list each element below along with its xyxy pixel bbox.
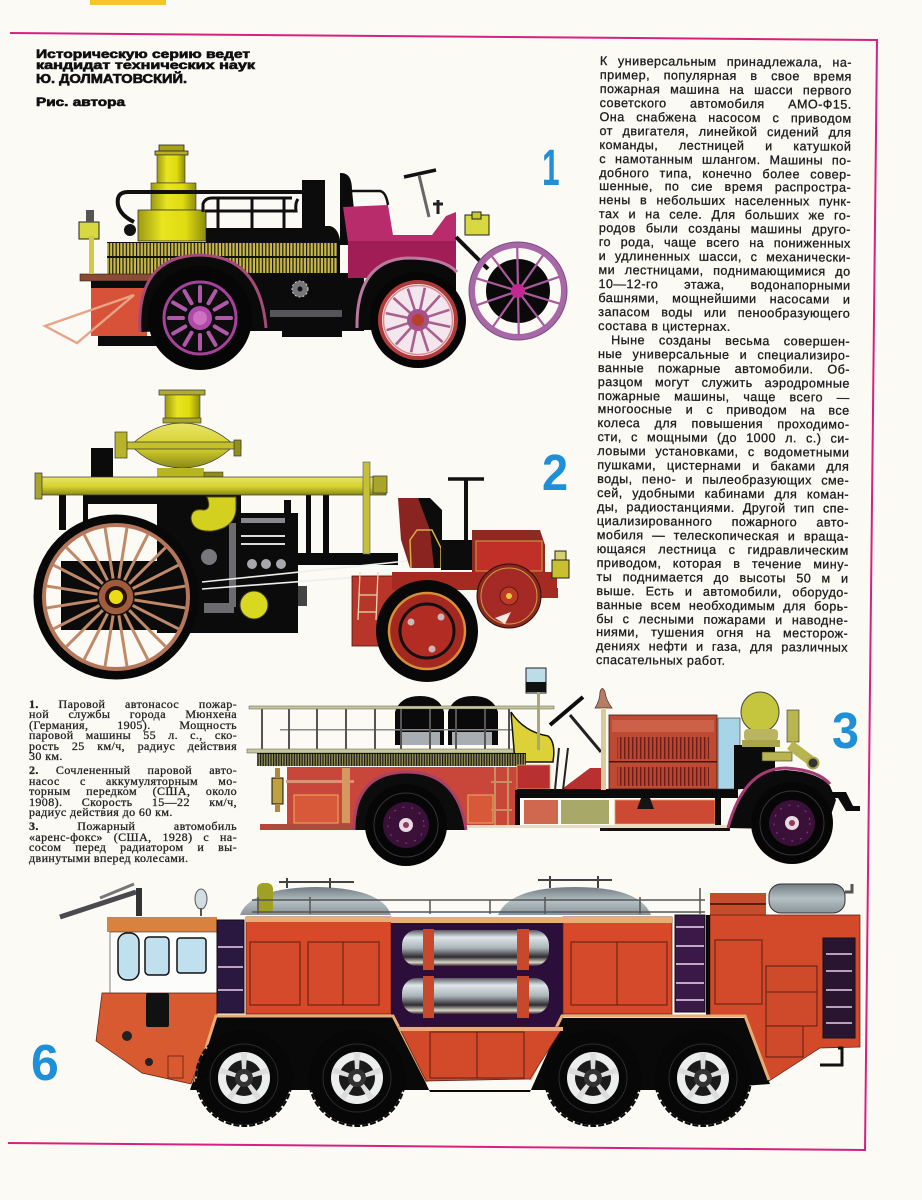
front small wheel xyxy=(477,564,541,628)
article text column: родов были созданы машины друго- xyxy=(599,221,851,237)
water monitor xyxy=(60,884,207,917)
byline heading xyxy=(36,49,255,109)
front fender and bumper xyxy=(728,768,860,830)
article text column: 10—12-го этажа, водонапорными xyxy=(598,277,851,293)
article text column: с намотанным шлангом. Машины по- xyxy=(599,152,851,167)
pipes and rails xyxy=(118,192,302,229)
figure captions: сосом перед радиатором и вы- xyxy=(29,840,237,854)
article text column: спасательных работ. xyxy=(596,653,725,668)
article text column: многоосные и с приводом на все xyxy=(598,402,850,418)
figure captions: 3. Пожарный автомобиль xyxy=(29,819,237,833)
seat post and rail xyxy=(340,173,388,245)
article text column: от двигателя, линейкой сидений для xyxy=(599,124,852,139)
article text column: добного типа, конечно более совер- xyxy=(599,165,851,181)
article text column: воды, пено- и пылеобразующих сме- xyxy=(597,472,849,488)
article text column: К универсальным принадлежала, на- xyxy=(600,54,852,70)
article text column: ми лестницами, поднимающимися до xyxy=(599,263,851,279)
article text column: ды, радиостанциями. Другой тип спе- xyxy=(597,500,849,516)
figure captions: торным передком (США, около xyxy=(29,784,237,798)
figure captions xyxy=(28,696,237,865)
truck 2: articulated steam pump, USA 1908 xyxy=(35,390,569,682)
article text column: пушками, цистернами и баками для xyxy=(597,458,849,474)
article text column: мобиля — телескопическая и враща- xyxy=(597,528,849,544)
brass dome and chimney xyxy=(115,390,241,478)
figure captions: 2. Сочлененный паровой авто- xyxy=(29,763,237,777)
figure captions: паровой машины 55 л. с., ско- xyxy=(29,728,237,742)
figure numbers: 2 xyxy=(542,445,568,501)
article text column: Ныне созданы весьма совершен- xyxy=(611,333,850,348)
waist trim xyxy=(195,1016,769,1082)
truck 6: multi-axle airport tender xyxy=(60,876,860,1126)
article text column: запасом воды или пенообразующего xyxy=(598,305,850,321)
figure numbers: 6 xyxy=(31,1034,59,1091)
steering xyxy=(404,170,443,217)
rear wheel xyxy=(148,266,252,370)
horizontal tube xyxy=(35,462,387,554)
front ladder xyxy=(217,920,244,1013)
rear fender xyxy=(140,255,266,332)
black boiler frame xyxy=(59,448,398,633)
figure captions: рость 25 км/ч, радиус действия xyxy=(29,739,237,753)
article text column: приводом, которая в течение мину- xyxy=(597,556,849,571)
spare wheel xyxy=(456,237,567,340)
figure captions: радиус действия до 60 км. xyxy=(29,805,173,819)
article text column: пожарные машины, чаще всего — xyxy=(598,388,850,404)
figure captions: «аренс-фокс» (США, 1928) с на- xyxy=(29,830,237,844)
article text column: циализированного пожарного авто- xyxy=(597,514,849,530)
article text column: дениях нефти и газа, для различных xyxy=(596,639,848,655)
article text column: колеса для повышения проходимо- xyxy=(598,416,850,432)
cab xyxy=(343,205,457,330)
body front section xyxy=(246,917,391,1014)
article text column: шенные, по сие время распростра- xyxy=(599,179,851,195)
hose bed xyxy=(107,242,337,274)
byline heading: Историческую серию ведет xyxy=(36,49,250,61)
side lamp xyxy=(552,551,569,578)
article text column: пожарная машина на шасси первого xyxy=(600,82,852,98)
rear body xyxy=(260,767,517,830)
figure captions: 1. Паровой автонасос пожар- xyxy=(29,696,237,710)
hood xyxy=(609,715,717,789)
rear platform xyxy=(45,274,156,346)
hood xyxy=(472,530,545,572)
body middle section xyxy=(391,917,672,1014)
article text column: ные универсальные и специализиро- xyxy=(598,347,850,362)
article text column: Она снабжена насосом с приводом xyxy=(600,110,852,125)
article text column: го рода, чаще всего на пониженных xyxy=(599,235,851,251)
article text column: ловыми установками, с водометными xyxy=(597,444,849,460)
front wheel xyxy=(370,272,466,368)
article text column: нены в небольших населенных пунк- xyxy=(599,193,851,209)
pump front xyxy=(734,692,818,789)
figure captions: насос с аккумуляторным мо- xyxy=(29,774,237,788)
main forecarriage wheel xyxy=(376,580,478,682)
ladder xyxy=(247,706,554,753)
lamps xyxy=(79,210,489,274)
truck 3: Ahrens-Fox, USA 1928 xyxy=(247,668,860,866)
wheels xyxy=(196,1030,751,1126)
article text column: ты поднимается до высоты 50 м и xyxy=(596,570,849,585)
tank bay xyxy=(391,923,563,1028)
boiler details xyxy=(201,518,307,619)
article text column: разцом могут служить аэродромные xyxy=(598,375,850,390)
hose bed xyxy=(257,753,526,766)
article text column: команды, лестницей и катушкой xyxy=(599,138,851,153)
roof domes xyxy=(240,876,651,915)
article text column xyxy=(596,54,852,668)
large rear wheel xyxy=(38,519,194,675)
article text column: советского автомобиля АМО-Ф15. xyxy=(600,96,852,111)
figure captions: 1908). Скорость 15—22 км/ч, xyxy=(29,795,237,809)
steering wheel xyxy=(550,697,601,790)
cab xyxy=(96,917,217,1084)
article text column: выше. Есть и автомобили, оборудо- xyxy=(596,584,848,599)
seat xyxy=(511,712,554,762)
figure captions: (Германия, 1905). Мощность xyxy=(29,718,237,732)
forecarriage body xyxy=(352,572,558,646)
lower panels xyxy=(466,790,736,831)
radiator xyxy=(718,718,740,789)
figure captions: ной службы города Мюнхена xyxy=(29,707,237,721)
article text column: сей, удобными кабинами для коман- xyxy=(597,486,849,502)
article text column: башнями, мощнейшими насосами и xyxy=(598,291,850,307)
black undercarriage xyxy=(190,915,770,1092)
truck 1: steam pump, Munich 1905 xyxy=(45,145,567,370)
gooseneck pipe xyxy=(191,497,236,531)
side lantern xyxy=(272,768,283,812)
lamp on post xyxy=(526,668,546,750)
article text column: пример, популярная в свое время xyxy=(600,68,852,84)
seat xyxy=(398,498,442,568)
article text column: сти, с мощными (до 1000 л. с.) си- xyxy=(597,430,850,446)
figure numbers: 3 xyxy=(832,702,859,759)
article text column: бы с лесными пожарами и наводне- xyxy=(596,611,848,627)
hose reels xyxy=(395,696,498,745)
boiler and chimney xyxy=(138,145,206,241)
article text column: ющаяся лестница с гидравлическим xyxy=(597,542,849,557)
byline heading: кандидат технических наук xyxy=(36,60,255,72)
article text column: и удлиненных шасси, с механически- xyxy=(599,249,851,265)
article text column: ниями, тушения огня на месторож- xyxy=(596,625,848,641)
tie rods xyxy=(202,561,413,589)
front wheel xyxy=(751,782,833,864)
article text column: тах и на селе. Для больших же го- xyxy=(599,207,851,223)
lower centre locker xyxy=(399,1027,563,1081)
figure numbers: 1 xyxy=(542,139,560,196)
roof rail xyxy=(252,888,705,914)
byline heading: Рис. автора xyxy=(36,97,126,109)
steering column xyxy=(441,479,484,570)
figure captions: 30 км. xyxy=(29,749,63,763)
body rear section xyxy=(710,915,860,1081)
article text column: состава в цистернах. xyxy=(598,319,731,334)
figure captions: двинутыми вперед колесами. xyxy=(29,851,189,865)
rear fender xyxy=(354,772,466,830)
black engine block xyxy=(206,180,340,282)
cab lower xyxy=(517,765,738,798)
chassis xyxy=(248,273,364,337)
figure numbers xyxy=(31,139,859,1091)
middle ladder xyxy=(675,915,705,1012)
bell and post xyxy=(595,688,612,790)
rear wheel xyxy=(365,784,447,866)
roof tank xyxy=(710,884,852,915)
byline heading: Ю. ДОЛМАТОВСКИЙ. xyxy=(36,71,187,86)
article text column: ванные пожарные автомобили. Об- xyxy=(598,361,850,376)
article text column: ванные всем необходимым для борь- xyxy=(596,598,848,613)
